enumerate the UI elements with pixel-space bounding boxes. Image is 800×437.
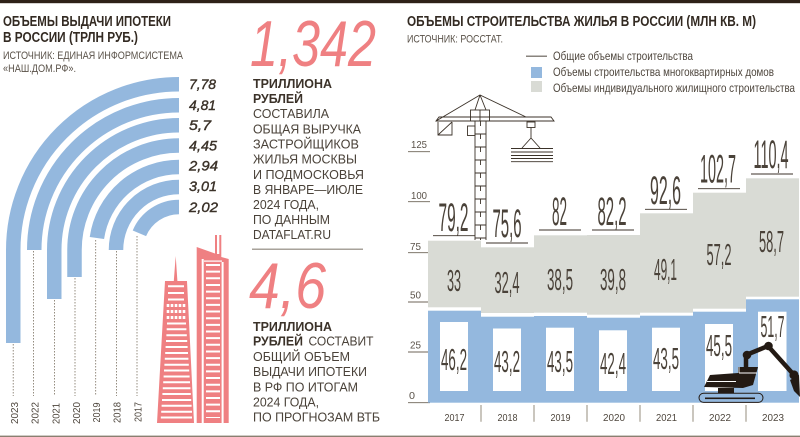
icon: skyscrapers <box>157 235 229 423</box>
year labels: mortgage: 2019 <box>91 402 103 422</box>
year labels: mortgage: 2017 <box>132 402 144 422</box>
stacked area: apartment buildings <box>428 299 799 403</box>
heading: mortgage volumes: ОБЪЕМЫ ВЫДАЧИ ИПОТЕКИ <box>3 14 171 30</box>
legend: Общие объемы строительства <box>553 49 693 63</box>
value labels: mortgage: 4,81 <box>189 97 216 113</box>
big number: 1,342: 1,342 <box>250 7 376 80</box>
text block: revenue: И ПОДМОСКОВЬЯ <box>253 168 364 182</box>
text block: revenue: ОБЩАЯ ВЫРУЧКА <box>253 122 362 136</box>
y axis: 75 <box>410 241 421 253</box>
values: individual housing: 32,4 <box>494 265 520 300</box>
text block: revenue: СОСТАВИЛА <box>253 107 330 121</box>
heading: mortgage volumes: В РОССИИ (ТРЛН РУБ.) <box>3 30 138 46</box>
y axis: 125 <box>411 139 427 151</box>
value labels: mortgage: 2,94 <box>188 158 218 174</box>
year labels: mortgage: 2020 <box>71 402 83 424</box>
value labels: mortgage: 3,01 <box>189 178 217 194</box>
values: individual housing: 39,8 <box>600 262 626 297</box>
values: totals: 82,2 <box>598 190 626 234</box>
text block: forecast: В РФ ПО ИТОГАМ <box>253 380 358 394</box>
source note: construction: ИСТОЧНИК: РОССТАТ. <box>407 34 503 46</box>
source note: mortgage: ИСТОЧНИК: ЕДИНАЯ ИНФОРМСИСТЕМА <box>3 50 184 62</box>
text block: forecast: ПО ПРОГНОЗАМ ВТБ <box>253 411 380 425</box>
arc chart: mortgage by year <box>13 84 179 343</box>
text block: revenue: DATAFLAT.RU <box>253 228 331 242</box>
values: individual housing: 49,1 <box>654 252 677 287</box>
values: totals: 75,6 <box>492 202 522 246</box>
stacked area: individual housing <box>428 178 799 315</box>
text block: revenue: ЗАСТРОЙЩИКОВ <box>253 136 359 152</box>
x axis years: 2022 <box>709 412 731 424</box>
panel: mortgage volumes <box>3 14 229 424</box>
values: apartment buildings: 46,2 <box>441 342 467 377</box>
values: apartment buildings: 43,5 <box>653 341 679 376</box>
value labels: mortgage: 7,78 <box>189 76 216 92</box>
text block: forecast: СОСТАВИТ <box>308 335 374 349</box>
x axis years: 2023 <box>762 412 784 424</box>
values: apartment buildings: 45,5 <box>706 328 732 363</box>
year labels: mortgage <box>9 402 144 424</box>
values: totals: 102,7 <box>700 148 736 192</box>
text block: revenue: ТРИЛЛИОНА <box>253 77 332 91</box>
callout: 1,342 trillion <box>250 7 376 242</box>
x axis years: 2019 <box>550 412 571 424</box>
y axis: 0 <box>409 390 415 402</box>
value labels: mortgage: 4,45 <box>189 138 217 154</box>
heading: mortgage volumes <box>3 14 171 46</box>
x axis years <box>444 405 784 424</box>
text block: revenue: ЖИЛЬЯ МОСКВЫ <box>253 153 357 167</box>
year labels: mortgage: 2018 <box>112 402 124 423</box>
x axis years: 2018 <box>498 412 518 424</box>
values: individual housing: 57,2 <box>706 237 732 272</box>
year labels: mortgage: 2023 <box>9 402 21 424</box>
values: apartment buildings: 42,4 <box>600 346 626 381</box>
text block: forecast: РУБЛЕЙ <box>253 334 303 349</box>
text block: revenue: ПО ДАННЫМ <box>253 213 330 227</box>
values: apartment buildings: 43,2 <box>494 344 520 379</box>
text block: revenue: РУБЛЕЙ <box>253 91 303 106</box>
text block: revenue: В ЯНВАРЕ—ИЮЛЕ <box>253 183 363 197</box>
icon: tower crane <box>436 95 554 240</box>
text block: forecast: ОБЩИЙ ОБЪЕМ <box>253 349 350 364</box>
x axis years: 2021 <box>656 412 677 424</box>
text block: forecast: ТРИЛЛИОНА <box>253 320 332 334</box>
values: totals: 92,6 <box>650 169 681 213</box>
y axis: 50 <box>410 290 421 302</box>
values: totals: 79,2 <box>438 196 468 240</box>
text block: forecast: ВЫДАЧИ ИПОТЕКИ <box>253 365 367 379</box>
source note: mortgage: «НАШ.ДОМ.РФ». <box>3 63 76 75</box>
panel: housing construction <box>407 14 800 424</box>
values: totals <box>433 133 793 246</box>
values: apartment buildings: 43,5 <box>547 344 573 379</box>
icon: left tower <box>157 256 194 423</box>
values: totals: 82 <box>552 190 567 234</box>
panel: key figures <box>249 7 380 425</box>
callout: 4,6 trillion <box>249 249 380 425</box>
y axis: 100 <box>411 190 427 202</box>
icon: excavator <box>699 342 800 402</box>
x axis years: 2017 <box>444 412 465 424</box>
dotted leader lines <box>13 236 137 396</box>
y axis: 25 <box>410 340 421 352</box>
text block: forecast <box>253 320 380 425</box>
value boxes <box>440 312 786 391</box>
values: individual housing: 33 <box>447 263 461 298</box>
values: individual housing <box>447 224 784 300</box>
value labels: mortgage: 2,02 <box>188 199 218 215</box>
source note: mortgage <box>3 50 184 75</box>
text block: forecast: 2024 ГОДА, <box>253 396 319 410</box>
legend <box>526 49 795 95</box>
text block: revenue <box>253 77 364 242</box>
text block: revenue: 2024 ГОДА, <box>253 198 319 212</box>
value labels: mortgage <box>188 76 218 215</box>
values: individual housing: 38,5 <box>547 262 573 297</box>
value labels: mortgage: 5,7 <box>189 117 212 133</box>
icon: right tower <box>197 235 229 423</box>
year labels: mortgage: 2021 <box>50 403 62 424</box>
y axis <box>408 139 430 403</box>
big number: 4,6: 4,6 <box>249 249 327 322</box>
year labels: mortgage: 2022 <box>30 402 42 424</box>
values: apartment buildings <box>441 309 784 381</box>
x axis years: 2020 <box>603 412 625 424</box>
